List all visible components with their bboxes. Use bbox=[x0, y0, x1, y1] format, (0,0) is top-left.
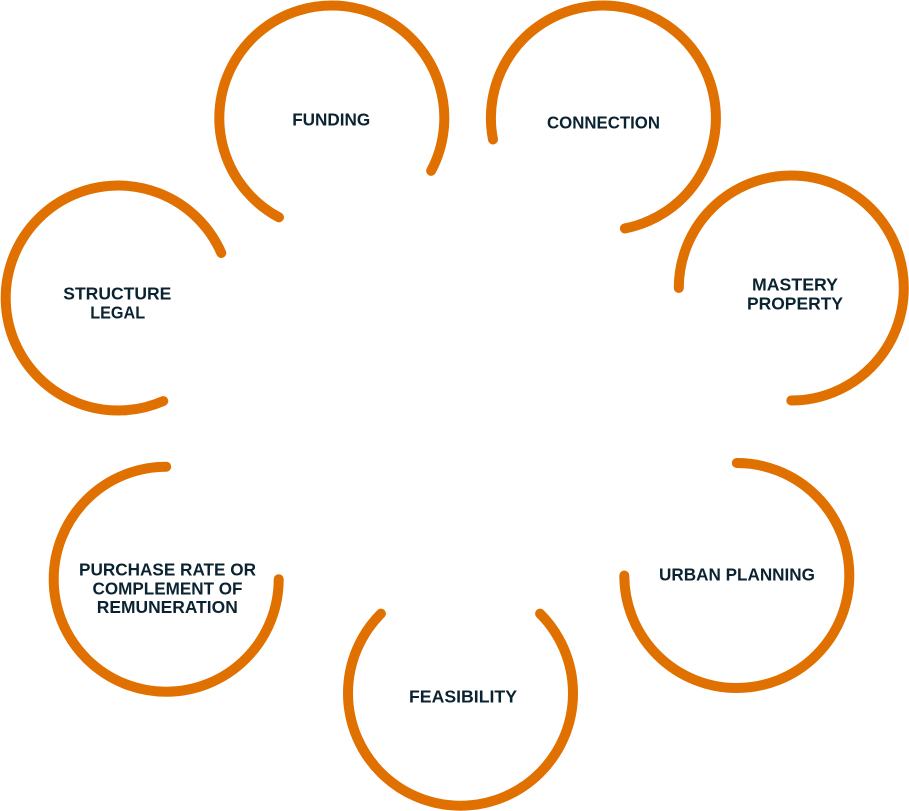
item: purchase rate or complement of remuneration bbox=[54, 467, 279, 692]
item: purchase rate or complement of remuneration: PURCHASE RATE OR bbox=[79, 560, 256, 580]
item: legal structure: STRUCTURE bbox=[63, 284, 171, 304]
item: connection bbox=[491, 5, 716, 228]
item: funding bbox=[219, 6, 444, 217]
item: feasibility: FEASIBILITY bbox=[409, 686, 517, 706]
item: urban planning: URBAN PLANNING bbox=[659, 564, 815, 584]
item: urban planning bbox=[624, 463, 849, 688]
item: purchase rate or complement of remuneration: COMPLEMENT OF bbox=[92, 578, 243, 598]
item: property mastery bbox=[679, 176, 904, 400]
item: purchase rate or complement of remuneration: REMUNERATION bbox=[97, 597, 238, 617]
item: legal structure: LEGAL bbox=[90, 302, 145, 322]
item: funding: FUNDING bbox=[292, 110, 370, 130]
item: property mastery: PROPERTY bbox=[747, 294, 843, 314]
item: legal structure bbox=[6, 185, 221, 410]
item: connection: CONNECTION bbox=[547, 112, 660, 132]
item: feasibility bbox=[348, 614, 573, 806]
item: property mastery: MASTERY bbox=[752, 274, 838, 294]
